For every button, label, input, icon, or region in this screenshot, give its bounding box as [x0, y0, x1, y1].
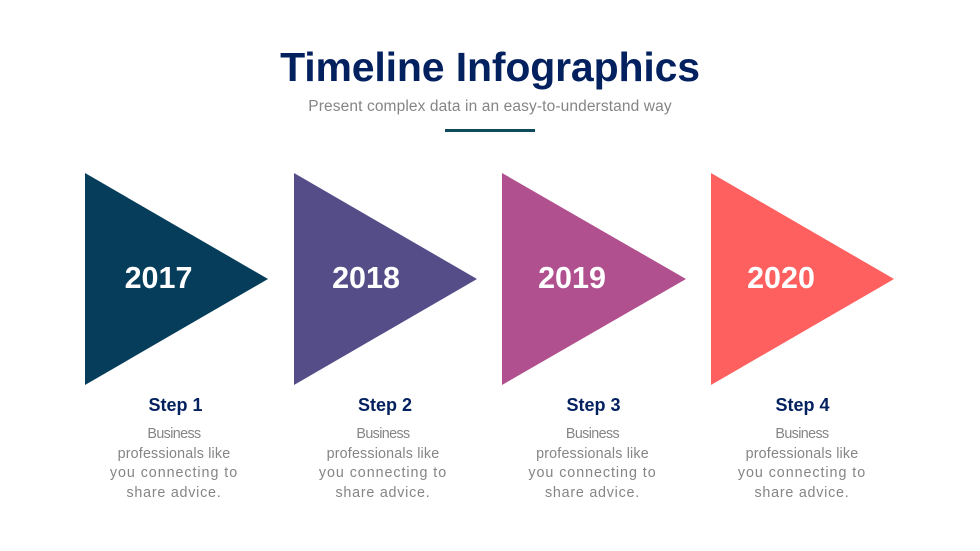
step 4 heading: Step 4	[775, 395, 830, 415]
step 1 text: you connecting to	[110, 465, 238, 481]
step 3 text: professionals like	[536, 446, 649, 462]
triangle 2019	[502, 173, 686, 385]
step 4 text: you connecting to	[738, 465, 866, 481]
step 1 text	[110, 426, 238, 500]
triangle 2020: 2020	[747, 261, 815, 295]
step 3 text: share advice.	[545, 484, 640, 500]
triangle 2018	[294, 173, 477, 385]
step 3 text	[528, 426, 657, 500]
subtitle: Present complex data in an easy-to-understand way	[308, 98, 672, 115]
step 1 heading: Step 1	[148, 395, 203, 415]
title: Timeline Infographics	[280, 44, 700, 90]
step 3 heading: Step 3	[566, 395, 621, 415]
step 1 text: share advice.	[126, 484, 222, 500]
step 4 text	[738, 426, 866, 500]
step 4 text: professionals like	[746, 446, 858, 462]
title underline	[445, 129, 535, 132]
step 1 text: professionals like	[118, 446, 230, 462]
triangle 2018: 2018	[332, 261, 400, 295]
step 2 text	[319, 426, 447, 500]
triangle 2017: 2017	[125, 261, 192, 295]
step 3 text: you connecting to	[528, 465, 657, 481]
step 2 text: professionals like	[327, 446, 439, 462]
step 4 text: Business	[775, 426, 829, 442]
triangle 2020	[711, 173, 894, 385]
step 1 text: Business	[147, 426, 201, 442]
step 2 text: Business	[356, 426, 410, 442]
step 2 text: you connecting to	[319, 465, 447, 481]
step 3 text: Business	[566, 426, 619, 442]
step 2 heading: Step 2	[358, 395, 412, 415]
step 2 text: share advice.	[335, 484, 431, 500]
triangle 2017	[85, 173, 268, 385]
step 4 text: share advice.	[754, 484, 850, 500]
triangle 2019: 2019	[538, 261, 606, 295]
